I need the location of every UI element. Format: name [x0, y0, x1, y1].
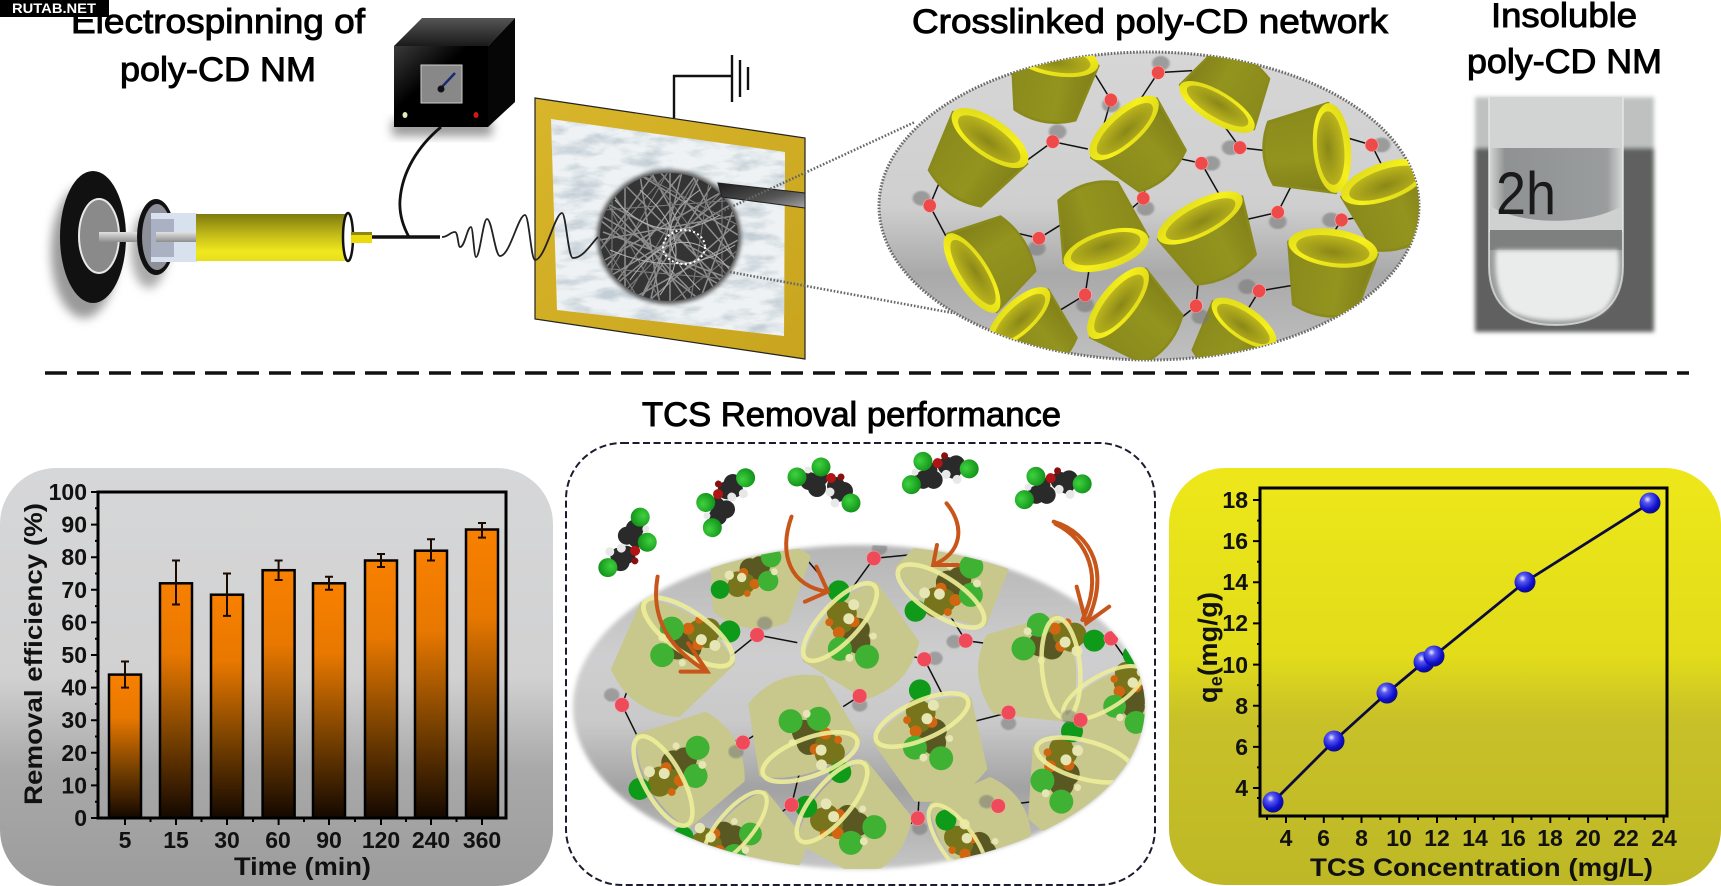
- zoom guide lines: [718, 122, 953, 313]
- axis title: removal efficiency: Removal efficiency (%): [20, 503, 48, 805]
- panel: removal efficiency bar chart: [0, 468, 553, 886]
- free TCS molecules: [597, 428, 1096, 583]
- x labels: 20: [1575, 825, 1601, 851]
- y labels: 18: [1222, 487, 1248, 513]
- axes frame: [91, 492, 506, 825]
- y axis labels: 80: [61, 544, 87, 570]
- y axis labels: 60: [61, 609, 87, 635]
- x labels: 8: [1355, 825, 1368, 851]
- section divider: [45, 371, 1689, 375]
- x labels: [1280, 825, 1677, 851]
- axis title: qe: q: [1193, 686, 1223, 703]
- axis title: time: Time (min): [234, 853, 371, 881]
- x labels: 24: [1651, 825, 1677, 851]
- x labels: 16: [1500, 825, 1526, 851]
- y labels: 12: [1222, 610, 1248, 636]
- x axis labels: 360: [463, 827, 501, 853]
- x labels: 14: [1462, 825, 1488, 851]
- axis title: concentration: TCS Concentration (mg/L): [1310, 854, 1653, 882]
- included TCS molecules: [628, 552, 1145, 858]
- panel: crosslinked network ellipse: [878, 50, 1420, 362]
- bars: [109, 530, 498, 818]
- data line: [1273, 503, 1650, 802]
- red crosslink nodes: [913, 56, 1390, 324]
- y labels: 4: [1235, 775, 1248, 801]
- tweezers: [718, 183, 805, 208]
- x axis labels: [119, 827, 501, 853]
- error bars: [121, 523, 486, 688]
- x labels: 4: [1280, 825, 1293, 851]
- y axis labels: 70: [61, 577, 87, 603]
- y axis labels: 20: [61, 740, 87, 766]
- x labels: 22: [1613, 825, 1639, 851]
- x axis labels: 30: [214, 827, 240, 853]
- title: insoluble: [1467, 0, 1662, 81]
- x axis labels: 60: [265, 827, 291, 853]
- network with adsorbed TCS: [571, 452, 1147, 872]
- icon: syringe pump assembly: [51, 171, 372, 318]
- y axis labels: 100: [49, 479, 87, 505]
- y labels: [1222, 487, 1248, 801]
- y axis labels: 90: [61, 512, 87, 538]
- watermark badge: RUTAB.NET: [12, 0, 96, 16]
- x labels: 12: [1424, 825, 1450, 851]
- y labels: 14: [1222, 569, 1248, 595]
- connection wire: [372, 127, 441, 237]
- network links: [930, 71, 1386, 327]
- links: [622, 554, 1126, 842]
- x labels: 18: [1537, 825, 1563, 851]
- x axis labels: 240: [412, 827, 450, 853]
- y labels: 8: [1235, 693, 1248, 719]
- y labels: 16: [1222, 528, 1248, 554]
- title: electrospinning: Electrospinning of: [71, 3, 366, 41]
- collector plate: [535, 98, 805, 359]
- photo: vial with membrane: 2h: [1496, 160, 1556, 227]
- ground symbol: [674, 55, 748, 118]
- icon: high voltage power supply: [392, 18, 515, 136]
- title: insoluble: poly-CD NM: [1467, 43, 1662, 81]
- watermark badge: [0, 0, 109, 17]
- x axis labels: 5: [119, 827, 132, 853]
- cyclodextrin cups: [928, 55, 1419, 360]
- title: electrospinning: poly-CD NM: [120, 51, 316, 89]
- axes frame: [1253, 488, 1667, 823]
- x labels: 6: [1317, 825, 1330, 851]
- x axis labels: 90: [316, 827, 342, 853]
- x axis labels: 120: [362, 827, 400, 853]
- panel: adsorption isotherm chart: [1169, 468, 1721, 885]
- translucent cups: [611, 548, 1145, 869]
- x labels: 10: [1386, 825, 1412, 851]
- y axis labels: 40: [61, 675, 87, 701]
- data points: [1262, 492, 1660, 812]
- y axis labels: 0: [74, 805, 87, 831]
- axis title: qe: (mg/g): [1193, 592, 1223, 676]
- photo: vial with membrane: [1475, 97, 1654, 332]
- y axis labels: 30: [61, 707, 87, 733]
- title: crosslinked network: Crosslinked poly-CD network: [912, 3, 1389, 41]
- title: electrospinning: [71, 3, 366, 89]
- axis title: qe: e: [1206, 676, 1226, 686]
- spinning jet: [442, 213, 598, 260]
- y axis labels: [49, 479, 87, 831]
- cup rims: [622, 553, 1151, 886]
- title: TCS removal: TCS Removal performance: [642, 396, 1061, 434]
- y axis labels: 10: [61, 772, 87, 798]
- panel: TCS removal dashed box: [566, 443, 1155, 885]
- orange arrows: [656, 503, 1109, 672]
- x axis labels: 15: [163, 827, 189, 853]
- y labels: 10: [1222, 652, 1248, 678]
- red nodes: [604, 542, 1118, 835]
- y labels: 6: [1235, 734, 1248, 760]
- y axis labels: 50: [61, 642, 87, 668]
